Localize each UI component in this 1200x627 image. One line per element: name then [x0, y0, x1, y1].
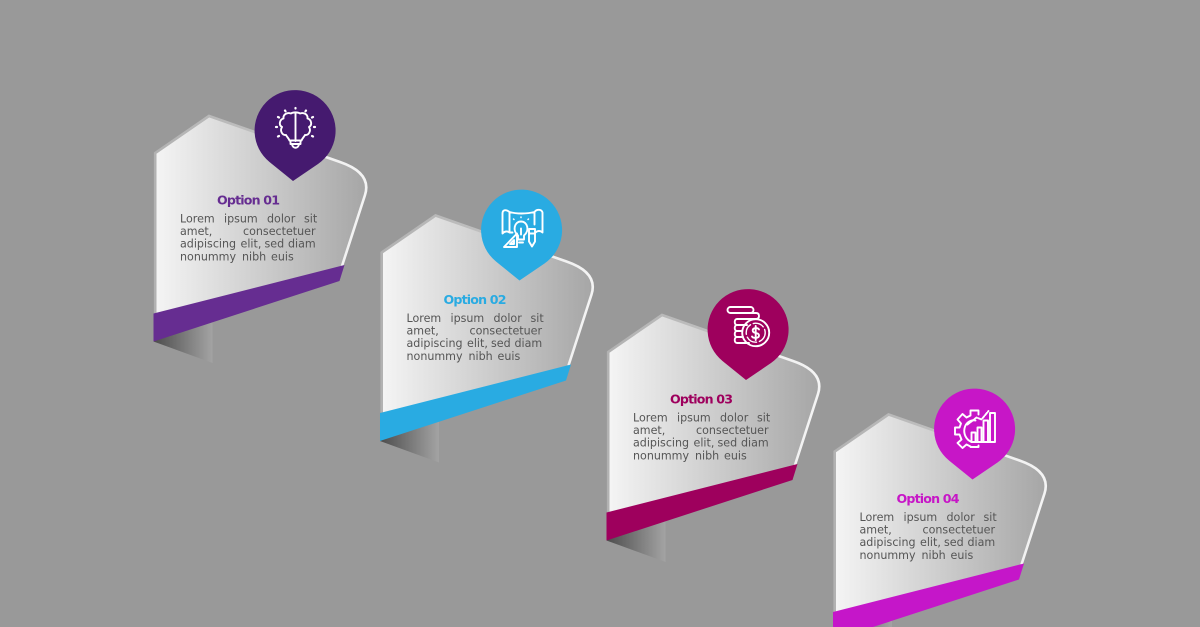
card 3 body text: dolor — [720, 412, 749, 424]
card 3 body text: nonummy — [633, 450, 689, 462]
card 2 body text: amet, — [406, 324, 439, 338]
card 1 body text: dolor — [267, 212, 296, 226]
card 2 body text: ipsum — [450, 312, 484, 325]
card 2 body text: elit, — [467, 337, 488, 350]
card 4 body text: diam — [968, 536, 995, 549]
card: option 03 — [606, 289, 819, 562]
card 3 body text: euis — [724, 450, 747, 462]
card 1 panel — [155, 116, 366, 314]
card 4 body text: sed — [944, 536, 964, 549]
icon: gear with rising bars — [955, 410, 995, 448]
card 4 pin — [934, 389, 1015, 480]
card 4 body text: consectetuer — [922, 524, 996, 536]
card 2 body text: nibh — [468, 350, 493, 363]
card 2 pin — [481, 190, 562, 280]
card 2 body text: adipiscing — [406, 337, 463, 350]
card 1 body text: adipiscing — [180, 238, 236, 250]
card 2 body text: nonummy — [406, 350, 463, 363]
card 1 body text: euis — [271, 250, 294, 264]
card 3 body text: ipsum — [677, 412, 711, 424]
card 4 panel — [835, 414, 1046, 612]
card 1 body text: amet, — [180, 225, 212, 238]
card 3 pin — [708, 289, 789, 380]
card 3 heading: Option 03 — [670, 392, 733, 406]
card 1 fold shadow — [154, 320, 212, 363]
card 1 body text: nonummy — [180, 250, 236, 264]
card 3 body text: amet, — [633, 424, 665, 437]
card 2 colour band — [380, 364, 571, 441]
card 3 body text: elit, — [694, 436, 714, 450]
card 1 body text: diam — [288, 238, 316, 250]
card 3 colour band — [606, 464, 798, 540]
card 2 body text: dolor — [494, 312, 522, 325]
card 4 body text: sit — [984, 511, 997, 524]
card 1 body text: sed — [264, 238, 284, 250]
card 3 fold shadow — [606, 519, 666, 562]
card 4 body text: nibh — [922, 549, 946, 562]
card 2 heading: Option 02 — [444, 292, 506, 307]
icon: brain light bulb — [276, 108, 315, 148]
card 2 body text: consectetuer — [470, 324, 543, 338]
card 4 body text: adipiscing — [860, 536, 916, 549]
card 4 fold shadow — [873, 620, 892, 627]
card 1 body text: sit — [304, 212, 318, 226]
card 1 colour band — [154, 265, 344, 342]
card: option 02 — [380, 190, 593, 462]
card 3 body text: diam — [741, 436, 769, 450]
card 3 body text: consectetuer — [696, 424, 769, 437]
card 1 pin — [255, 90, 336, 181]
card 1 body text: nibh — [242, 250, 266, 264]
card 1 body text: Lorem — [180, 212, 215, 226]
card 4 colour band — [833, 564, 1024, 627]
card 1 body text: ipsum — [224, 212, 258, 226]
card 3 panel — [608, 315, 819, 513]
card 4 body text: ipsum — [904, 511, 937, 524]
card 3 body text: Lorem — [633, 412, 668, 424]
card 3 body text: sit — [757, 412, 771, 424]
card 4 body text: elit, — [920, 536, 941, 549]
card 2 fold shadow — [380, 420, 439, 462]
card 2 body text: diam — [514, 337, 542, 350]
card 3 body text: nibh — [695, 450, 719, 462]
card 3 body text: adipiscing — [633, 436, 689, 450]
card 4 body text: nonummy — [860, 549, 916, 562]
card: option 04 — [833, 389, 1046, 627]
card 2 body text: euis — [498, 350, 520, 363]
card 4 body text: Lorem — [860, 511, 894, 524]
card 2 body text: sit — [530, 312, 544, 325]
card: option 01 — [154, 90, 366, 363]
card 3 body text: sed — [718, 436, 737, 450]
card 2 body text: sed — [491, 337, 511, 350]
card 4 body text: euis — [950, 549, 973, 562]
card 4 heading: Option 04 — [896, 491, 960, 506]
card 4 body text: dolor — [946, 511, 975, 524]
card 2 body text: Lorem — [406, 312, 441, 325]
card 2 panel — [382, 216, 593, 414]
icon: coins with dollar — [728, 307, 769, 346]
card 4 body text: amet, — [860, 524, 892, 536]
icon: blueprint with bulb — [502, 210, 542, 247]
card 1 heading: Option 01 — [217, 192, 280, 208]
card 1 body text: elit, — [240, 238, 261, 250]
card 1 body text: consectetuer — [243, 225, 316, 238]
